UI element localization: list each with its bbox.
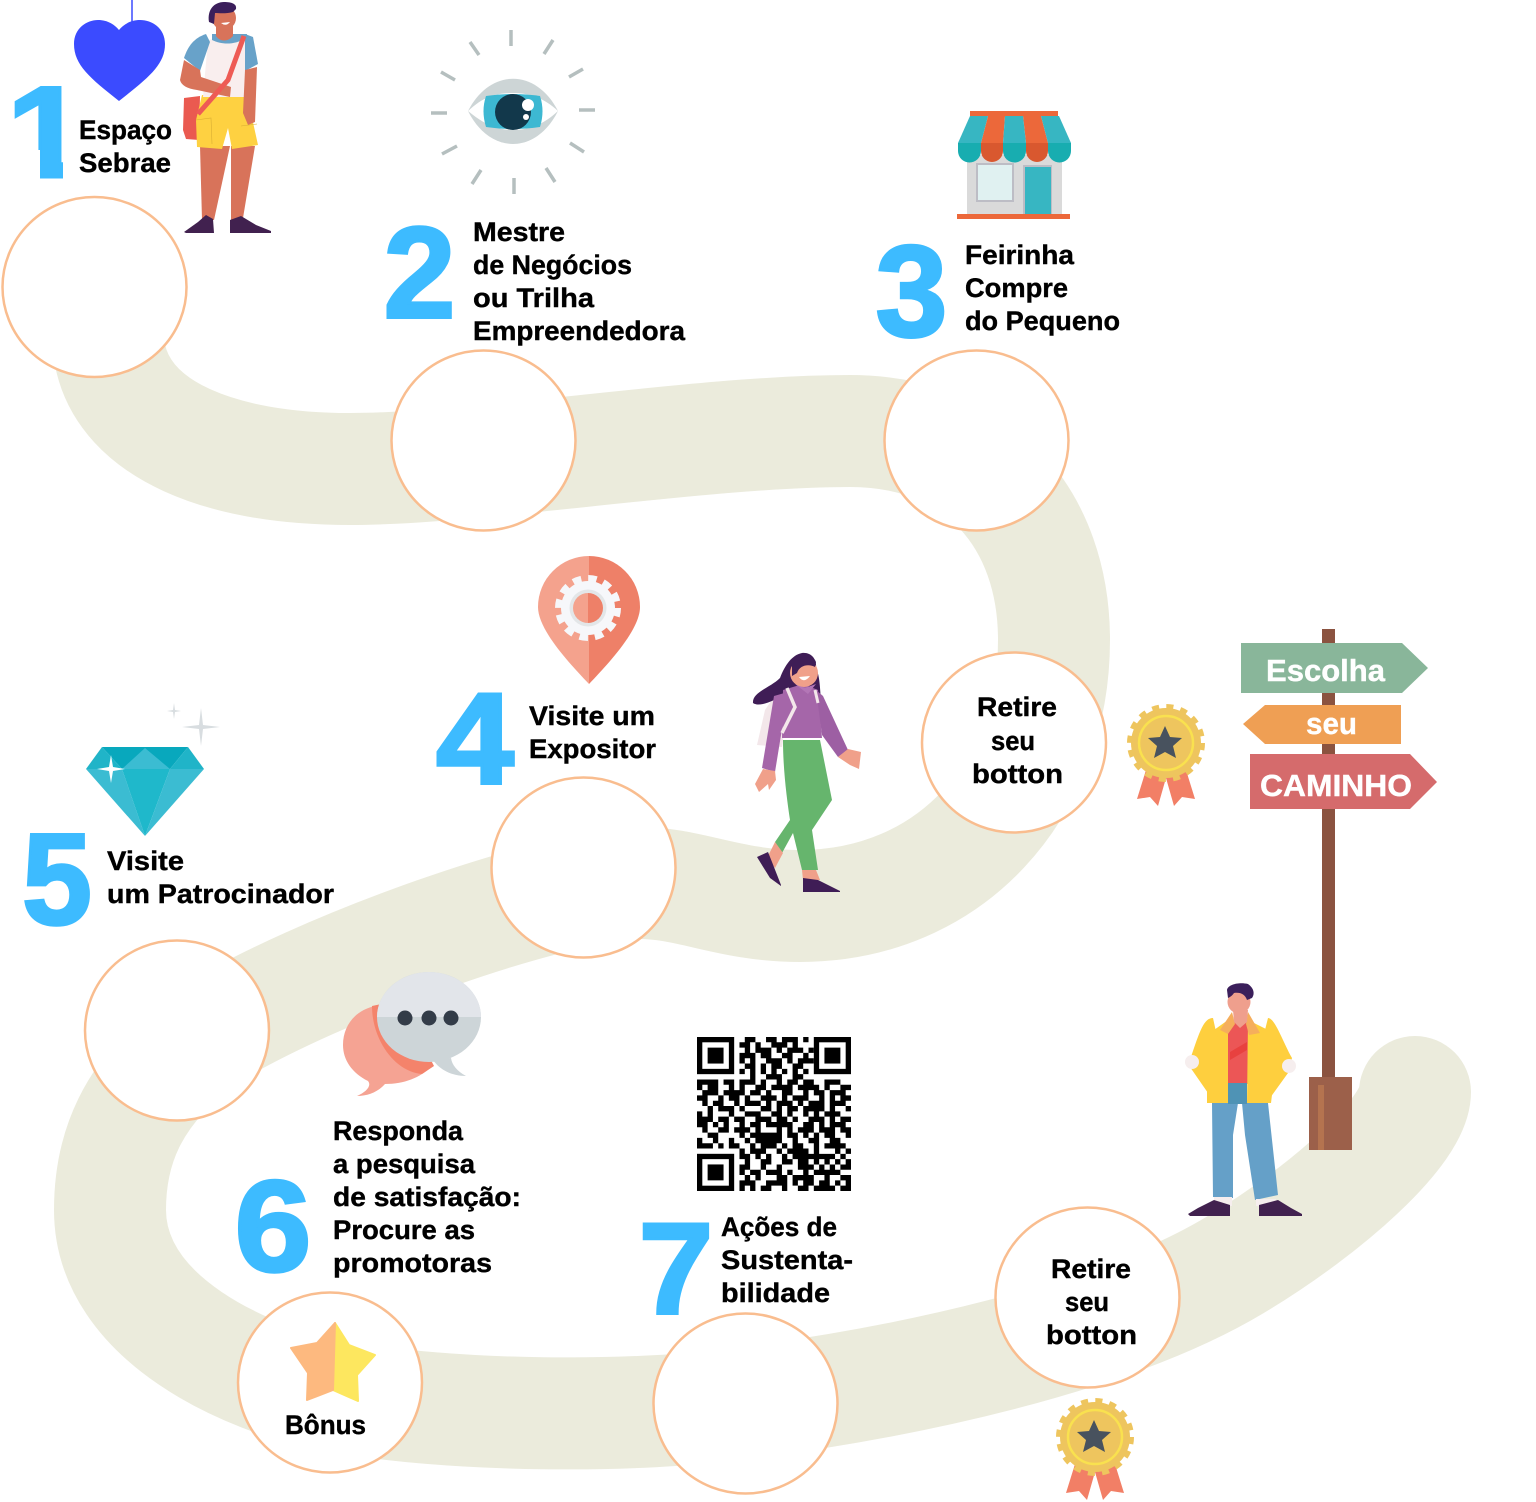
icon: shop <box>957 111 1071 219</box>
pole <box>1322 629 1335 1084</box>
label: Expositor <box>529 734 656 764</box>
winding path <box>110 355 1415 1413</box>
number 4: 4 <box>436 666 514 812</box>
circle <box>85 940 269 1120</box>
label: do Pequeno <box>965 306 1120 336</box>
label: ou Trilha <box>473 283 595 313</box>
sign: seu <box>1243 705 1401 744</box>
label: botton <box>1046 1320 1137 1350</box>
circle: bônus <box>238 1292 422 1472</box>
step 1: Espaço Sebrae <box>2 0 186 377</box>
label: Ações de <box>721 1212 837 1242</box>
number 3: 3 <box>876 218 948 364</box>
icon: medal (second) <box>1059 1401 1131 1500</box>
step 5: Visite um Patrocinador <box>22 703 335 1120</box>
step 6: Responda a pesquisa <box>234 972 521 1299</box>
illustration: man with shoulder bag <box>180 2 271 233</box>
label: Bônus <box>285 1410 366 1440</box>
label: Sebrae <box>79 148 171 178</box>
sign: CAMINHO <box>1250 754 1437 809</box>
circle <box>492 778 676 958</box>
number 6: 6 <box>234 1153 312 1299</box>
icon: heart <box>74 0 165 101</box>
icon: eye <box>431 30 595 194</box>
label: botton <box>972 759 1063 789</box>
icon: map pin with gear <box>538 556 640 684</box>
step 2: Mestre de Negócios <box>384 30 686 530</box>
label: seu <box>991 726 1035 756</box>
label: de satisfação: <box>333 1182 521 1212</box>
sign: CAMINHO: CAMINHO <box>1260 768 1412 803</box>
label: Mestre <box>473 217 565 247</box>
number 1: 1 <box>6 59 86 205</box>
qr code <box>697 1040 851 1188</box>
label: a pesquisa <box>333 1149 476 1179</box>
sign: Escolha <box>1241 643 1428 693</box>
label: de Negócios <box>473 250 632 280</box>
label: Retire <box>1051 1254 1131 1284</box>
circle <box>884 350 1068 530</box>
pole base <box>1309 1077 1352 1150</box>
label: Sustenta- <box>721 1245 853 1275</box>
number 2: 2 <box>384 200 456 346</box>
step 4: Visite um Expositor <box>436 556 676 958</box>
label: Espaço <box>79 115 172 145</box>
number 5: 5 <box>22 806 92 952</box>
circle <box>654 1314 838 1494</box>
sign: seu: seu <box>1306 706 1357 741</box>
step 7: Ações de Sustentabilidade <box>638 1196 853 1494</box>
label: seu <box>1065 1287 1109 1317</box>
sign: Escolha: Escolha <box>1266 653 1386 688</box>
label: Visite <box>107 846 184 876</box>
label: Empreendedora <box>473 316 686 346</box>
step 3: Feirinha <box>876 111 1120 530</box>
number 7: 7 <box>638 1196 714 1342</box>
label: Compre <box>965 273 1068 303</box>
circle: retire seu botton (second) <box>996 1208 1180 1388</box>
label: bilidade <box>721 1278 830 1308</box>
circle: retire seu botton (first) <box>922 652 1106 832</box>
circle <box>2 197 186 377</box>
illustration: man in yellow jacket <box>1185 983 1302 1216</box>
circle <box>392 350 576 530</box>
label: promotoras <box>333 1248 492 1278</box>
illustration: walking woman <box>753 653 861 892</box>
icon: medal (first) <box>1130 707 1202 806</box>
label: Retire <box>977 692 1057 722</box>
label: Visite um <box>529 701 655 731</box>
label: Procure as <box>333 1215 475 1245</box>
label: Responda <box>333 1116 464 1146</box>
icon: star <box>291 1323 375 1401</box>
icon: diamond <box>86 703 220 836</box>
label: Feirinha <box>965 240 1075 270</box>
label: um Patrocinador <box>107 879 335 909</box>
signpost: Escolha seu caminho <box>1241 629 1437 1150</box>
icon: chat bubbles <box>343 972 481 1096</box>
